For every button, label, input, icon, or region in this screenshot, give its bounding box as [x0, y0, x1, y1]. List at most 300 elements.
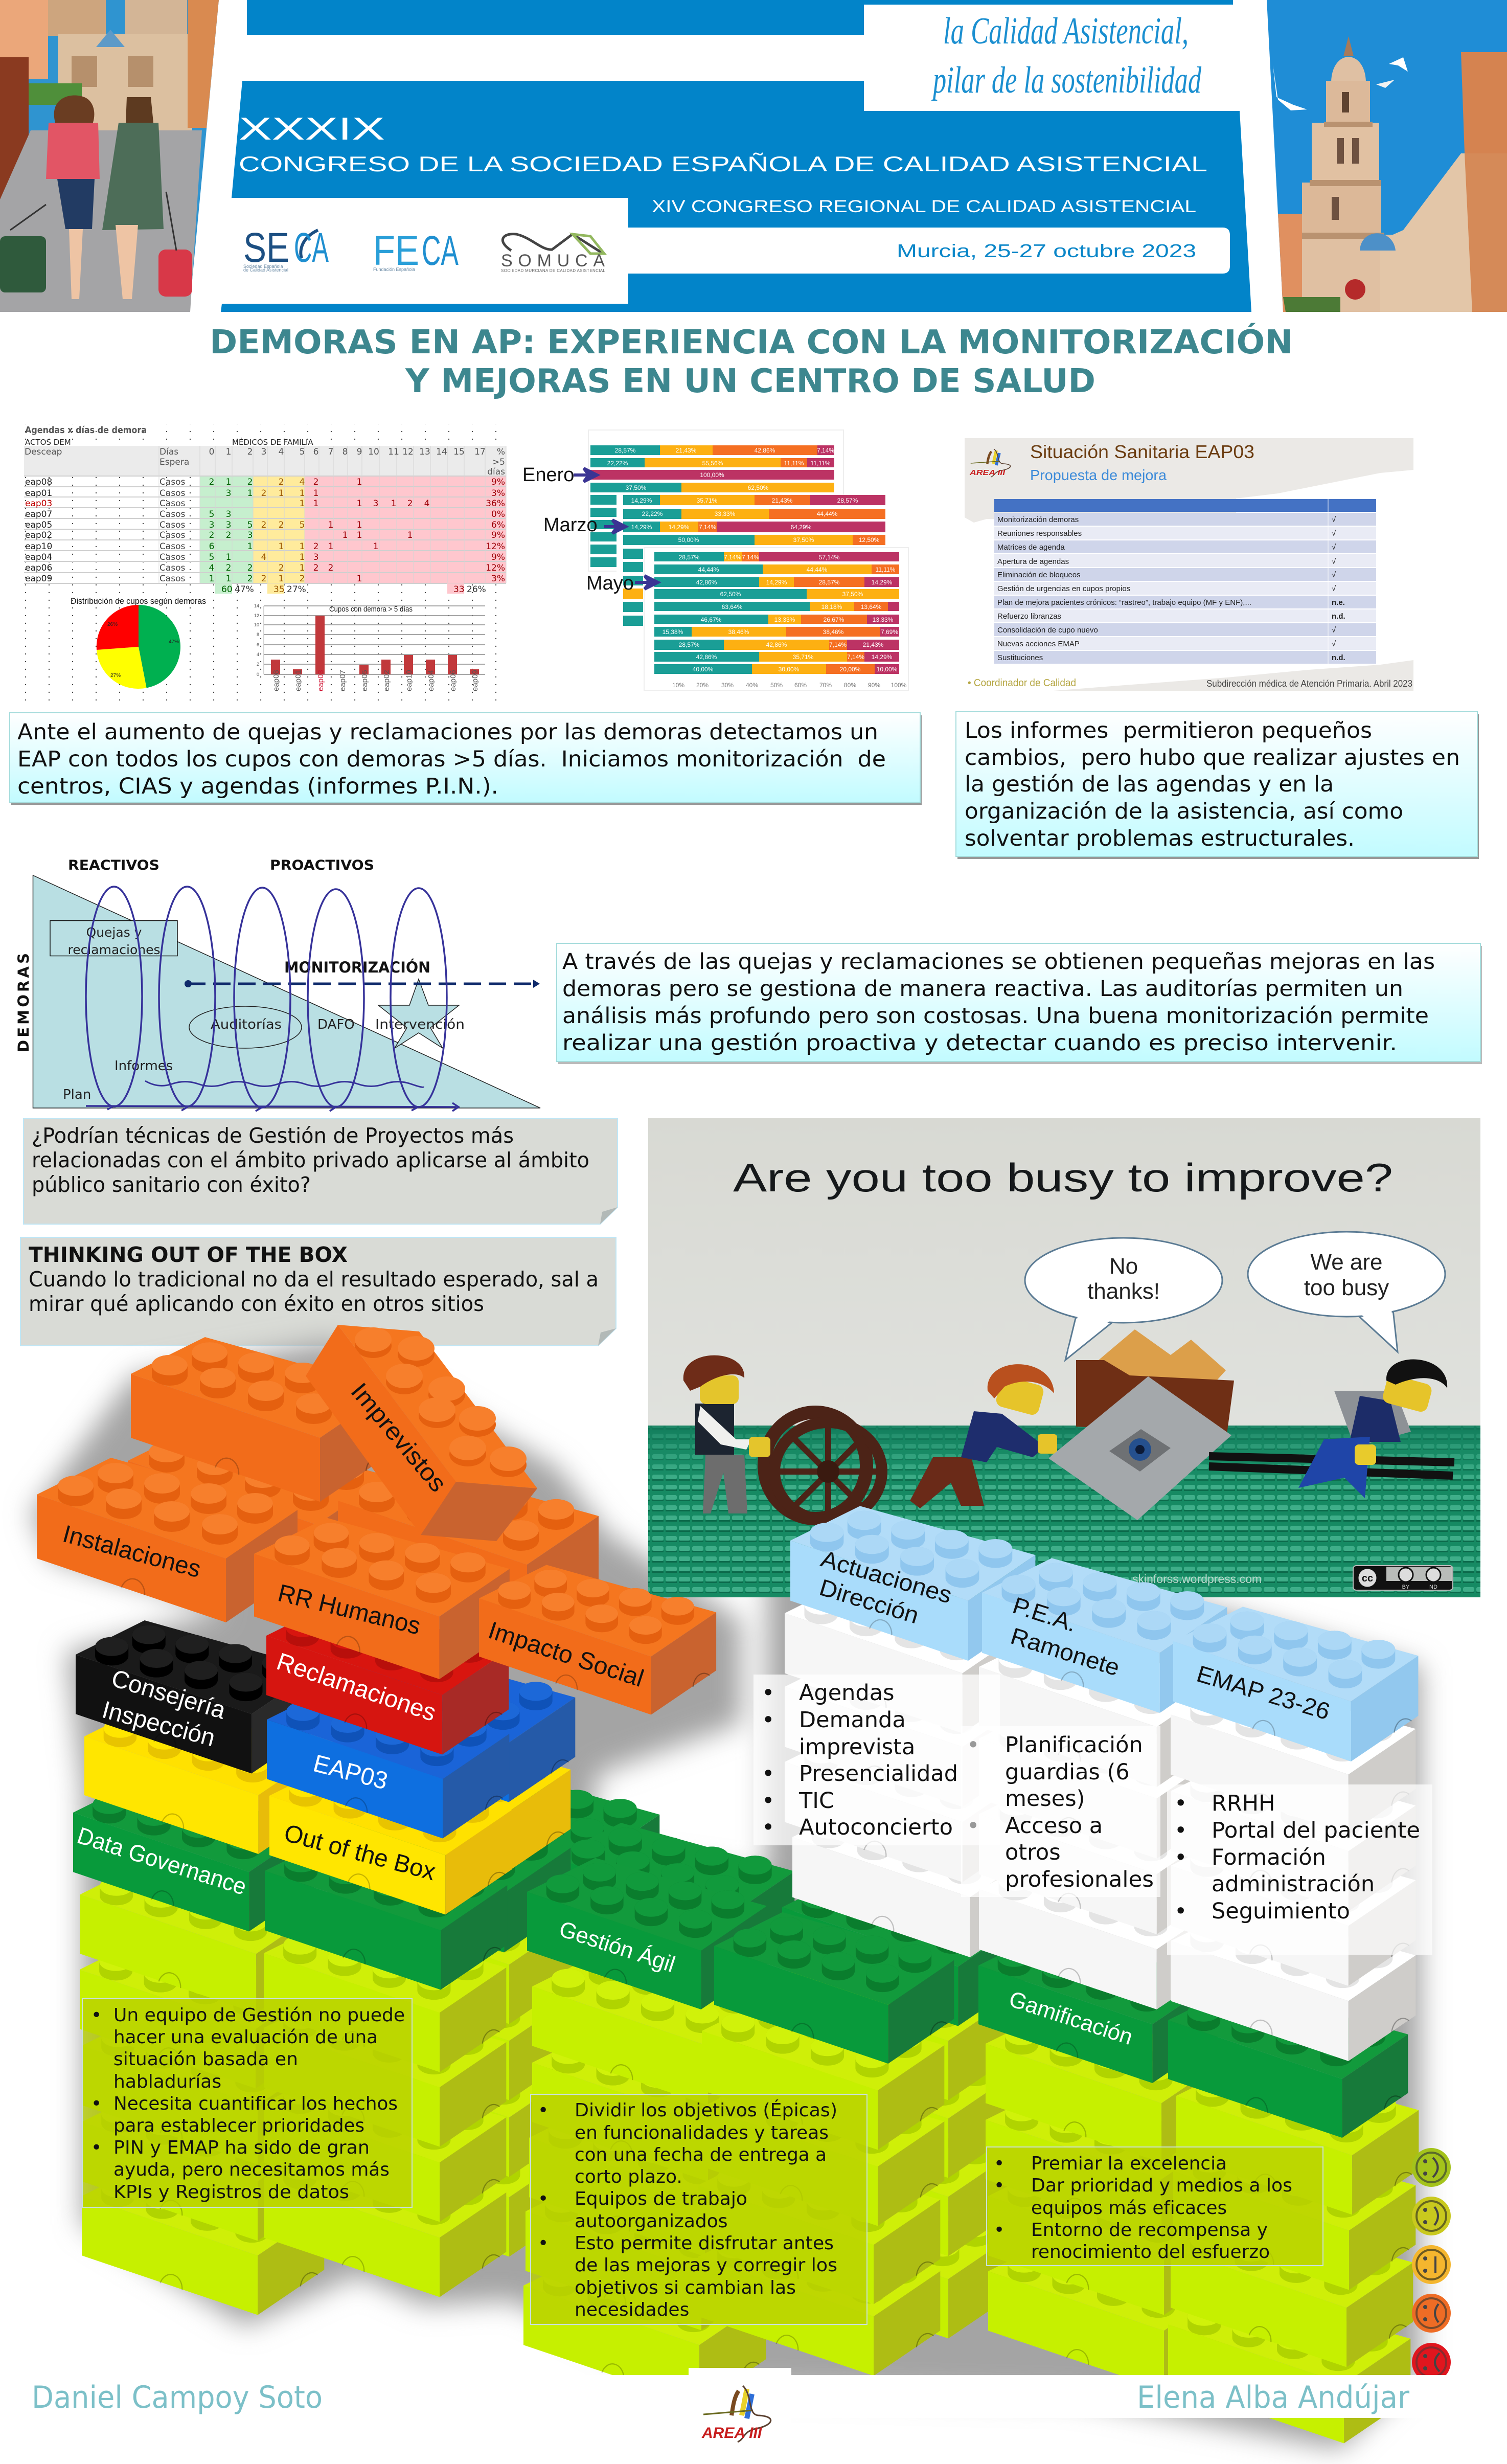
delay table: 1 — [391, 499, 396, 509]
slide title: Situación Sanitaria EAP03 — [1030, 441, 1254, 462]
delay table: 1 — [357, 520, 362, 530]
text box: complaints and monitoring — [10, 713, 922, 805]
panel: monitoring table and charts — [20, 424, 511, 700]
chart: May: 42,86% — [696, 579, 717, 586]
logo: Area III small: AREA III — [969, 468, 1006, 477]
speech bubble: we are too busy — [1248, 1232, 1445, 1352]
header image: Murcia cathedral tower — [1267, 0, 1507, 312]
text box: reports results: organización de la asistencia, así como — [965, 799, 1403, 824]
dashed arrow: monitoring — [185, 980, 540, 988]
delay table: 2 — [279, 520, 284, 530]
list: EMAP 23-26: • — [1174, 1818, 1187, 1843]
bar chart: appointments delayed over 5 days: eap06 — [449, 670, 458, 691]
brick: RR Humanos: RR Humanos — [275, 1579, 423, 1640]
delay table: 4 — [424, 499, 429, 509]
brick: RR Humanos — [254, 1518, 510, 1679]
chart: January: 11,11% — [811, 460, 831, 467]
logo: FECA: FE — [373, 228, 419, 274]
PDCA loops — [86, 887, 447, 1107]
bar chart: appointments delayed over 5 days: 12 — [254, 613, 259, 618]
delay table: 2 — [328, 563, 333, 573]
author: Daniel Campoy Soto: Daniel Campoy Soto — [32, 2380, 323, 2415]
text box: agile management — [531, 2094, 867, 2324]
chart: May: 70% — [819, 682, 832, 689]
improvement proposals table: Consolidación de cupo nuevo — [997, 626, 1098, 635]
delay table: eap01 — [25, 488, 52, 499]
pie chart: distribution of appointments by delay: 26% — [107, 622, 118, 627]
chart: May: 26,67% — [824, 616, 844, 623]
delay table: 1 — [226, 447, 231, 457]
delay table: 2 — [226, 530, 231, 540]
chart: May: 10,00% — [877, 666, 898, 673]
delay table: 1 — [300, 552, 305, 562]
brick: EMAP 23-26 — [1173, 1607, 1418, 1761]
delay table: Espera — [159, 457, 189, 467]
brick: EMAP 23-26: EMAP 23-26 — [1194, 1660, 1333, 1725]
text box: gamification: • — [994, 2153, 1004, 2174]
delay table: 9 — [357, 447, 362, 457]
text box: reactive vs proactive explanation: demoras pero se gestiona de manera reactiva. Las auditorías permiten un — [562, 976, 1403, 1002]
list: EMAP 23-26: Formación — [1212, 1845, 1326, 1870]
improvement proposals table: Matrices de agenda — [997, 543, 1065, 552]
delay table: 3 — [226, 509, 231, 519]
label and arrow: Marzo — [543, 514, 626, 536]
brick: Data Governance: Data Governance — [74, 1822, 250, 1900]
label: plan: Plan — [63, 1087, 91, 1102]
delay table: 12% — [486, 541, 505, 552]
improvement proposals table: Plan de mejora pacientes crónicos: “rastreo”, trabajo equipo (MF y ENF),... — [997, 598, 1251, 607]
delay table: 3 — [261, 447, 266, 457]
chart: March: 22,22% — [642, 510, 663, 517]
brick: P.E.A. Ramonete: P.E.A. — [1010, 1592, 1080, 1637]
text box: data governance: KPIs y Registros de datos — [113, 2182, 349, 2203]
brick shadows — [31, 1340, 1421, 2449]
improvement proposals table: √ — [1332, 543, 1336, 552]
creative commons badge: BY — [1402, 1584, 1410, 1590]
delay table: eap10 — [25, 541, 52, 552]
chart: May: 7,14% — [847, 653, 864, 661]
callout: project management question: ¿Podrían técnicas de Gestión de Proyectos más — [32, 1123, 514, 1148]
label and arrow: Enero: Enero — [522, 464, 574, 486]
speech bubble: we are too busy: We are — [1310, 1250, 1383, 1275]
chart: May: 80% — [844, 682, 856, 689]
text box: complaints and monitoring: centros, CIAS y agendas (informes P.I.N.). — [17, 774, 498, 799]
bar chart: appointments delayed over 5 days: 14 — [254, 603, 259, 608]
delay table: eap02 — [25, 530, 52, 540]
chart: March: 37,50% — [793, 536, 814, 544]
delay table: 1 — [209, 574, 214, 584]
delay table: 2 — [247, 563, 253, 573]
chart: January: 62,50% — [748, 484, 769, 491]
delay table: 3 — [373, 499, 378, 509]
list: EMAP 23-26: administración — [1212, 1871, 1375, 1897]
text box: data governance: situación basada en — [113, 2049, 298, 2070]
delay table: eap03 — [25, 499, 52, 509]
text box: gamification — [987, 2147, 1323, 2266]
logo: FECA: Fundación Española — [373, 267, 415, 272]
list: Actuaciones Dirección: Agendas — [799, 1680, 894, 1706]
brick: Imprevistos: Imprevistos — [346, 1378, 451, 1497]
delay table: 3 — [226, 520, 231, 530]
chart: May: 37,50% — [842, 591, 863, 598]
chart: March: 14,29% — [631, 524, 652, 531]
chart: May: 42,86% — [766, 641, 787, 648]
chart: May: 14,29% — [872, 653, 893, 661]
logo: SOMUCA — [501, 234, 606, 273]
delay table: 1 — [357, 477, 362, 487]
delay table: 17 — [474, 447, 486, 457]
text box: gamification: Premiar la excelencia — [1031, 2153, 1227, 2174]
bar chart: appointments delayed over 5 days: eap05 — [360, 670, 369, 691]
text box: complaints and monitoring: EAP con todos los cupos con demoras >5 días. Iniciamos monitorización de — [17, 747, 886, 772]
chart: May: 90% — [868, 682, 880, 689]
minifigure pushing cart — [910, 1364, 1057, 1508]
text box: agile management: • — [538, 2100, 549, 2121]
logo: SECA — [243, 224, 329, 273]
table heading: Agendas x días de demora — [25, 425, 147, 436]
logo: Area III small — [969, 449, 1010, 477]
improvement proposals table: Gestión de urgencias en cupos propios — [997, 584, 1130, 593]
chart: May: 46,67% — [701, 616, 722, 623]
logo: SOMUCA: SOCIEDAD MURCIANA DE CALIDAD ASISTENCIAL — [501, 268, 606, 273]
delay table: Desceap — [25, 447, 62, 457]
improvement proposals table: √ — [1332, 640, 1336, 648]
delay table: 4 — [209, 563, 214, 573]
delay table: 27% — [287, 584, 306, 595]
text box: data governance: • — [91, 2137, 102, 2158]
label: DAFO: DAFO — [317, 1017, 355, 1032]
chart: May: 35,71% — [793, 653, 814, 661]
text box: reports results: solventar problemas estructurales. — [965, 826, 1355, 851]
chart: March: 50,00% — [678, 536, 699, 544]
delay table: 1 — [247, 541, 253, 552]
delay table: 6% — [491, 520, 505, 530]
bar chart: appointments delayed over 5 days: eap04 — [427, 670, 436, 691]
callout: project management question: relacionadas con el ámbito privado aplicarse al ámbito — [32, 1148, 589, 1172]
brick: Actuaciones Dirección: Actuaciones — [818, 1545, 955, 1609]
delay table: 1 — [357, 499, 362, 509]
white stack: P.E.A. — [979, 1632, 1224, 2009]
list: Actuaciones Dirección: TIC — [798, 1788, 834, 1814]
delay table: 3 — [209, 520, 214, 530]
text box: reports results — [956, 712, 1479, 859]
delay table: 5 — [300, 520, 305, 530]
delay table: eap04 — [25, 552, 52, 562]
delay table: 0% — [491, 509, 505, 519]
chart: May: 40% — [746, 682, 758, 689]
chart: May: 30% — [721, 682, 734, 689]
speech bubble: we are too busy: too busy — [1304, 1275, 1389, 1300]
list: Actuaciones Dirección: Presencialidad — [799, 1761, 958, 1787]
delay table: 47% — [235, 584, 254, 595]
bar chart: appointments delayed over 5 days: eap07 — [338, 670, 347, 691]
delay table: 1 — [328, 520, 333, 530]
brick: Consejería Inspección: Inspección — [99, 1696, 218, 1752]
brick: EAP03: EAP03 — [310, 1750, 391, 1795]
box: quejas y reclamaciones: reclamaciones — [67, 942, 161, 957]
smiley: happy — [1412, 2197, 1451, 2235]
text box: data governance: PIN y EMAP ha sido de gran — [113, 2137, 370, 2158]
delay table: 3 — [226, 488, 231, 499]
text box: data governance: para establecer prioridades — [113, 2115, 364, 2136]
text box: agile management: con una fecha de entrega a — [575, 2144, 827, 2165]
label and arrow: Enero — [522, 464, 597, 486]
chart: May: 28,57% — [679, 641, 700, 648]
slide footer left: • Coordinador de Calidad — [968, 677, 1076, 689]
text box: data governance: hacer una evaluación de una — [113, 2027, 378, 2048]
text box: data governance: • — [91, 2005, 102, 2026]
delay table: días — [487, 467, 505, 477]
congress name: CONGRESO DE LA SOCIEDAD ESPAÑOLA DE CALIDAD ASISTENCIAL — [239, 152, 1207, 176]
logo: SOMUCA: SOMUCA — [501, 251, 605, 270]
delay table: 14 — [436, 447, 447, 457]
delay table: >5 — [492, 457, 505, 467]
text box: data governance: habladurías — [113, 2071, 221, 2092]
brick: Out of the Box: Out of the Box — [281, 1819, 439, 1886]
delay table: 2 — [247, 477, 253, 487]
delay table: 1 — [373, 541, 378, 552]
congress number: XXXIX — [239, 111, 385, 147]
delay table: 2 — [261, 574, 266, 584]
brick: Gamificación: Gamificación — [1006, 1986, 1136, 2050]
delay table: 1 — [226, 552, 231, 562]
lime and green column centre right — [698, 1912, 1230, 2390]
chart: March: 44,44% — [817, 510, 838, 517]
delay table: 1 — [300, 541, 305, 552]
bar chart: appointments delayed over 5 days: eap01 — [294, 670, 303, 691]
brick: P.E.A. Ramonete: Ramonete — [1008, 1622, 1123, 1681]
improvement proposals table: Sustituciones — [997, 653, 1043, 662]
pie chart: distribution of appointments by delay — [71, 596, 206, 689]
chart: January: 55,56% — [702, 460, 723, 467]
chart: May: 100% — [891, 682, 907, 689]
chart: May: 10% — [672, 682, 684, 689]
author: Elena Alba Andújar: Elena Alba Andújar — [1137, 2380, 1409, 2415]
chart: May: 7,14% — [742, 554, 759, 561]
chart: January — [588, 430, 843, 571]
chart: January: 28,57% — [615, 447, 636, 454]
delay table: MÉDICOS DE FAMILIA — [232, 437, 313, 447]
title: DEMORAS EN AP: EXPERIENCIA CON LA MONITORIZACIÓN — [210, 323, 1293, 361]
bar chart: appointments delayed over 5 days: eap02 — [382, 670, 391, 691]
text box: gamification: renocimiento del esfuerzo — [1031, 2242, 1270, 2263]
text box: agile management: de las mejoras y corregir los — [575, 2255, 837, 2276]
chart: May: 7,14% — [829, 641, 847, 648]
logo: FECA — [373, 228, 459, 274]
text box: gamification: • — [994, 2220, 1004, 2241]
improvement proposals table: Reuniones responsables — [997, 529, 1082, 538]
list: Actuaciones Dirección: • — [762, 1788, 774, 1814]
logo: SECA: Sociedad Española — [243, 264, 283, 269]
chart: January: 11,11% — [784, 460, 804, 467]
text box: agile management: Dividir los objetivos (Épicas) — [575, 2099, 837, 2121]
chart: January: 22,22% — [607, 460, 628, 467]
text box: gamification: • — [994, 2175, 1004, 2196]
delay table: Casos — [159, 530, 186, 540]
label: informes: Informes — [115, 1058, 173, 1074]
brick: Actuaciones Dirección: Dirección — [816, 1574, 922, 1629]
chart: May: 7,69% — [881, 628, 898, 636]
minifigure pulling cart — [1298, 1359, 1447, 1498]
list: EMAP 23-26: • — [1174, 1791, 1187, 1816]
list: P.E.A. Ramonete: profesionales — [1005, 1867, 1154, 1892]
delay table — [24, 437, 506, 595]
list: P.E.A. Ramonete — [961, 1726, 1160, 1897]
chart: March: 33,33% — [715, 510, 736, 517]
chart: March: 21,43% — [772, 497, 793, 504]
delay table: Casos — [159, 563, 186, 573]
chart: May: 14,29% — [766, 579, 787, 586]
delay table: Casos — [159, 488, 186, 499]
list: Actuaciones Dirección: • — [762, 1815, 774, 1840]
brick: Impacto Social: Impacto Social — [485, 1617, 647, 1692]
label and arrow: Marzo: Marzo — [543, 514, 598, 536]
heading: reactivos: REACTIVOS — [68, 857, 159, 873]
list: P.E.A. Ramonete: meses) — [1005, 1786, 1085, 1812]
list: P.E.A. Ramonete: • — [967, 1732, 979, 1758]
delay table: 9% — [491, 552, 505, 562]
list: Actuaciones Dirección: • — [762, 1707, 774, 1733]
delay table: 1 — [300, 499, 305, 509]
website credit: skinforss.wordpress.com — [1132, 1572, 1262, 1586]
text box: agile management: Esto permite disfrutar antes — [575, 2233, 834, 2254]
delay table: 2 — [261, 520, 266, 530]
callout: project management question — [24, 1119, 618, 1224]
list: EMAP 23-26: Seguimiento — [1212, 1898, 1350, 1924]
delay table: 15 — [453, 447, 465, 457]
speech bubble: no thanks: thanks! — [1087, 1279, 1160, 1304]
title: Y MEJORAS EN UN CENTRO DE SALUD — [405, 363, 1095, 400]
delays triangle — [33, 875, 540, 1108]
delay table: 9% — [491, 477, 505, 487]
delay table: 8 — [342, 447, 348, 457]
white stack: Actuaciones — [785, 1578, 1037, 1957]
photo title: Are you too busy to improve? — [733, 1155, 1393, 1200]
chart: May: 44,44% — [807, 566, 828, 573]
label and arrow: Mayo — [586, 573, 658, 594]
wavy line: reports — [145, 1081, 423, 1087]
bar chart: appointments delayed over 5 days: 0 — [257, 672, 259, 677]
delay table: 35 — [273, 584, 285, 595]
bar chart: appointments delayed over 5 days: eap08 — [272, 670, 281, 691]
lego wall: lime bricks left — [80, 1649, 794, 2315]
improvement proposals table: √ — [1332, 557, 1336, 566]
delay table: 4 — [300, 477, 305, 487]
chart: May: 13,33% — [774, 616, 795, 623]
delay table: 1 — [313, 488, 318, 499]
pie chart: distribution of appointments by delay: 47% — [169, 639, 179, 645]
box: quejas y reclamaciones — [50, 920, 177, 957]
pie chart: distribution of appointments by delay: 27% — [110, 673, 121, 679]
delay table: 26% — [467, 584, 486, 595]
delay table: Casos — [159, 477, 186, 487]
list: P.E.A. Ramonete: Acceso a — [1005, 1813, 1103, 1839]
chart: May: 42,86% — [696, 653, 717, 661]
oval: auditorías — [189, 1006, 302, 1048]
delay table: eap09 — [25, 574, 52, 584]
creative commons badge — [1353, 1566, 1453, 1590]
chart: May: 7,14% — [724, 554, 741, 561]
improvement proposals table: √ — [1332, 571, 1336, 579]
delay table: 60 — [221, 584, 233, 595]
chart: January: 42,86% — [755, 447, 775, 454]
delay table: 1 — [313, 499, 318, 509]
chart: May: 62,50% — [720, 591, 741, 598]
chart: May: 40,00% — [693, 666, 714, 673]
list: EMAP 23-26: • — [1174, 1898, 1187, 1924]
regional congress name: XIV CONGRESO REGIONAL DE CALIDAD ASISTENCIAL — [652, 197, 1196, 216]
bar chart: appointments delayed over 5 days: 8 — [257, 632, 259, 637]
delay table: Casos — [159, 509, 186, 519]
delay table: Casos — [159, 499, 186, 509]
delay table: 33 — [453, 584, 465, 595]
creative commons badge: ND — [1429, 1584, 1437, 1590]
chart: May: 63,64% — [722, 603, 743, 611]
improvement proposals table — [994, 499, 1376, 664]
delay table: 2 — [407, 499, 413, 509]
delay table: 1 — [279, 488, 284, 499]
brick: Gestión Ágil: Gestión Ágil — [556, 1916, 678, 1977]
list: P.E.A. Ramonete: Planificación — [1005, 1732, 1143, 1758]
text box: gamification: Dar prioridad y medios a los — [1031, 2175, 1292, 2196]
creative commons badge: cc — [1362, 1573, 1373, 1584]
text box: reactive vs proactive explanation: realizar una gestión proactiva y detectar cuando es preciso intervenir. — [562, 1030, 1397, 1056]
brick: Imprevistos — [306, 1325, 537, 1541]
oval: auditorías: Auditorías — [211, 1017, 282, 1032]
logo: SECA: de Calidad Asistencial — [243, 267, 288, 273]
text box: gamification: equipos más eficaces — [1031, 2198, 1227, 2219]
brick: P.E.A. Ramonete — [982, 1558, 1227, 1713]
bar chart: appointments delayed over 5 days — [254, 603, 485, 691]
delay table: 2 — [279, 563, 284, 573]
yellow brick left — [84, 1703, 324, 1854]
logo: SECA: SE — [243, 224, 289, 271]
chart: May: 28,57% — [819, 579, 840, 586]
delay table: Casos — [159, 552, 186, 562]
brick: Consejería Inspección — [76, 1620, 318, 1773]
chart: May: 15,38% — [663, 628, 683, 636]
panel: stacked bar charts by month — [522, 430, 908, 690]
delay table: Casos — [159, 574, 186, 584]
bar chart: appointments delayed over 5 days: 4 — [257, 652, 259, 657]
brick: Reclamaciones — [266, 1601, 509, 1755]
callout: project management question: público sanitario con éxito? — [32, 1172, 311, 1197]
text box: reactive vs proactive explanation — [557, 943, 1482, 1064]
delay table: 2 — [300, 574, 305, 584]
chart: May: 38,46% — [728, 628, 749, 636]
star: intervención: Intervención — [375, 1017, 465, 1032]
delay table: % — [497, 447, 505, 457]
delay table: 2 — [209, 530, 214, 540]
delay table: 1 — [357, 530, 362, 540]
text box: agile management: necesidades — [575, 2299, 689, 2320]
delay table: Casos — [159, 520, 186, 530]
text box: agile management: • — [538, 2188, 549, 2209]
brick: Instalaciones — [37, 1458, 298, 1622]
delay table: 5 — [209, 552, 214, 562]
delay table: 1 — [300, 563, 305, 573]
delay table: 13 — [419, 447, 430, 457]
text box: reactive vs proactive explanation: análisis más profundo pero son costosas. Una buena monitorización permite — [562, 1003, 1429, 1029]
delay table: 1 — [226, 477, 231, 487]
list: Actuaciones Dirección — [754, 1675, 1000, 1845]
smiley scale — [1412, 2148, 1451, 2382]
header blue shape — [221, 0, 1251, 312]
chart: May: 18,18% — [821, 603, 842, 611]
text box: reports results: cambios, pero hubo que realizar ajustes en — [965, 745, 1460, 771]
improvement proposals table: n.e. — [1332, 598, 1345, 607]
chart: March: 64,29% — [791, 524, 812, 531]
